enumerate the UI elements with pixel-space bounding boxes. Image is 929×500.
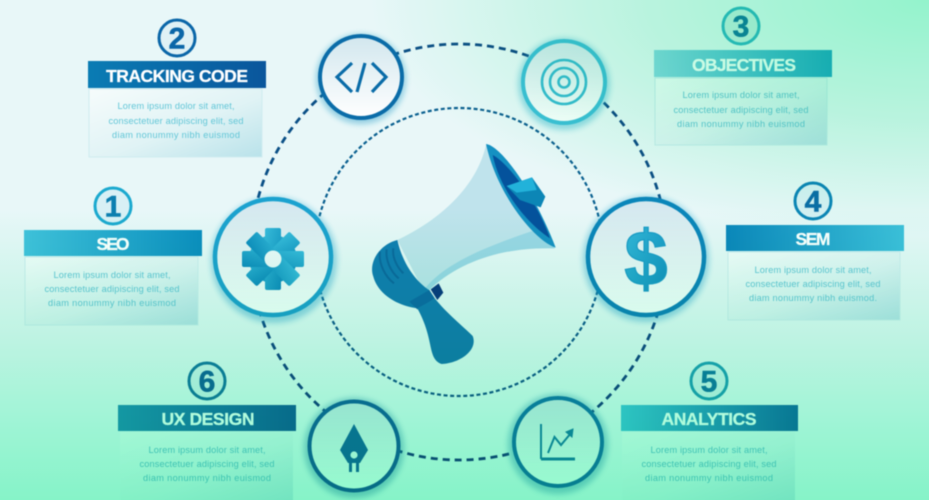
heading: sem: [726, 225, 904, 251]
heading: objectives: OBJECTIVES: [692, 55, 796, 75]
circle: objectives icon: [518, 38, 610, 130]
text block: consectetuer adipiscing elit, sed: [642, 459, 776, 469]
panel body: [655, 78, 827, 145]
panel: sem: [726, 183, 904, 320]
circle: analytics chart icon: [508, 394, 608, 494]
heading: analytics: [621, 405, 798, 431]
icon: line chart: [541, 424, 575, 459]
text block: Lorem ipsum dolor sit amet,: [682, 90, 800, 100]
number badge 3: 3: [733, 10, 749, 44]
panel: ux design: [118, 363, 296, 500]
heading: sem: SEM: [796, 229, 830, 249]
text block: diam nonummy nibh euismod: [677, 119, 805, 129]
icon: gear: [242, 228, 304, 290]
number badge 2: [159, 20, 195, 56]
text block: consectetuer adipiscing elit, sed: [108, 116, 244, 126]
number badge 4: [795, 183, 831, 219]
heading: analytics: ANALYTICS: [662, 409, 756, 429]
panel body: [120, 432, 293, 500]
circle: seo gear icon: [211, 197, 337, 323]
circle: ux design pen icon: [304, 398, 404, 498]
text block: consectetuer adipiscing elit, sed: [674, 105, 808, 115]
text block: diam nonummy nibh euismod: [143, 473, 271, 483]
panel: objectives: [654, 8, 832, 145]
text block: consectetuer adipiscing elit, sed: [746, 279, 880, 289]
text block: Lorem ipsum dolor sit amet,: [650, 445, 768, 455]
text block: Lorem ipsum dolor sit amet,: [754, 265, 872, 275]
heading: tracking code: [88, 61, 266, 88]
panel: analytics: [621, 363, 798, 500]
text block: diam nonummy nibh euismod: [645, 473, 773, 483]
icon: target: [542, 60, 586, 104]
icon: dollar sign: $: [624, 214, 668, 302]
text block: [44, 270, 180, 308]
text block: Lorem ipsum dolor sit amet,: [148, 445, 266, 455]
circle: tracking code icon: [316, 34, 406, 124]
text block: consectetuer adipiscing elit, sed: [140, 459, 274, 469]
panel body: [728, 252, 900, 320]
text block: [674, 90, 808, 129]
inner dashed ring: [315, 108, 603, 396]
text block: [642, 445, 776, 483]
heading: seo: [24, 230, 202, 256]
panel body: [622, 432, 795, 500]
number badge 6: [189, 363, 225, 399]
heading: seo: SEO: [96, 234, 130, 254]
text block: [108, 101, 244, 140]
text block: diam nonummy nibh euismod.: [749, 293, 877, 303]
number badge 2: 2: [169, 22, 185, 56]
text block: diam nonummy nibh euismod: [112, 130, 240, 140]
icon: megaphone: [372, 144, 556, 364]
text block: Lorem ipsum dolor sit amet,: [54, 270, 170, 280]
text block: consectetuer adipiscing elit, sed: [44, 284, 180, 294]
number badge 6: 6: [199, 366, 215, 398]
text block: [746, 265, 880, 303]
number badge 3: [723, 8, 759, 44]
heading: ux design: [118, 405, 296, 431]
number badge 1: 1: [105, 190, 121, 224]
heading: tracking code: TRACKING CODE: [106, 66, 248, 86]
outer dashed ring: [251, 44, 667, 460]
number badge 5: 5: [701, 366, 717, 398]
panel body: [25, 257, 198, 325]
text block: Lorem ipsum dolor sit amet,: [118, 101, 234, 111]
icon: pen nib: [340, 424, 368, 472]
heading: ux design: UX DESIGN: [162, 409, 254, 429]
number badge 5: [691, 363, 727, 399]
number badge 4: 4: [805, 186, 822, 218]
circle: sem dollar icon: [583, 196, 709, 322]
number badge 1: [95, 188, 131, 224]
panel: seo: [24, 188, 202, 325]
text block: diam nonummy nibh euismod: [48, 298, 176, 308]
text block: [140, 445, 274, 483]
heading: objectives: [654, 50, 832, 77]
icon: code brackets: [337, 63, 386, 92]
panel body: [89, 89, 262, 157]
panel: tracking code: [88, 20, 266, 157]
